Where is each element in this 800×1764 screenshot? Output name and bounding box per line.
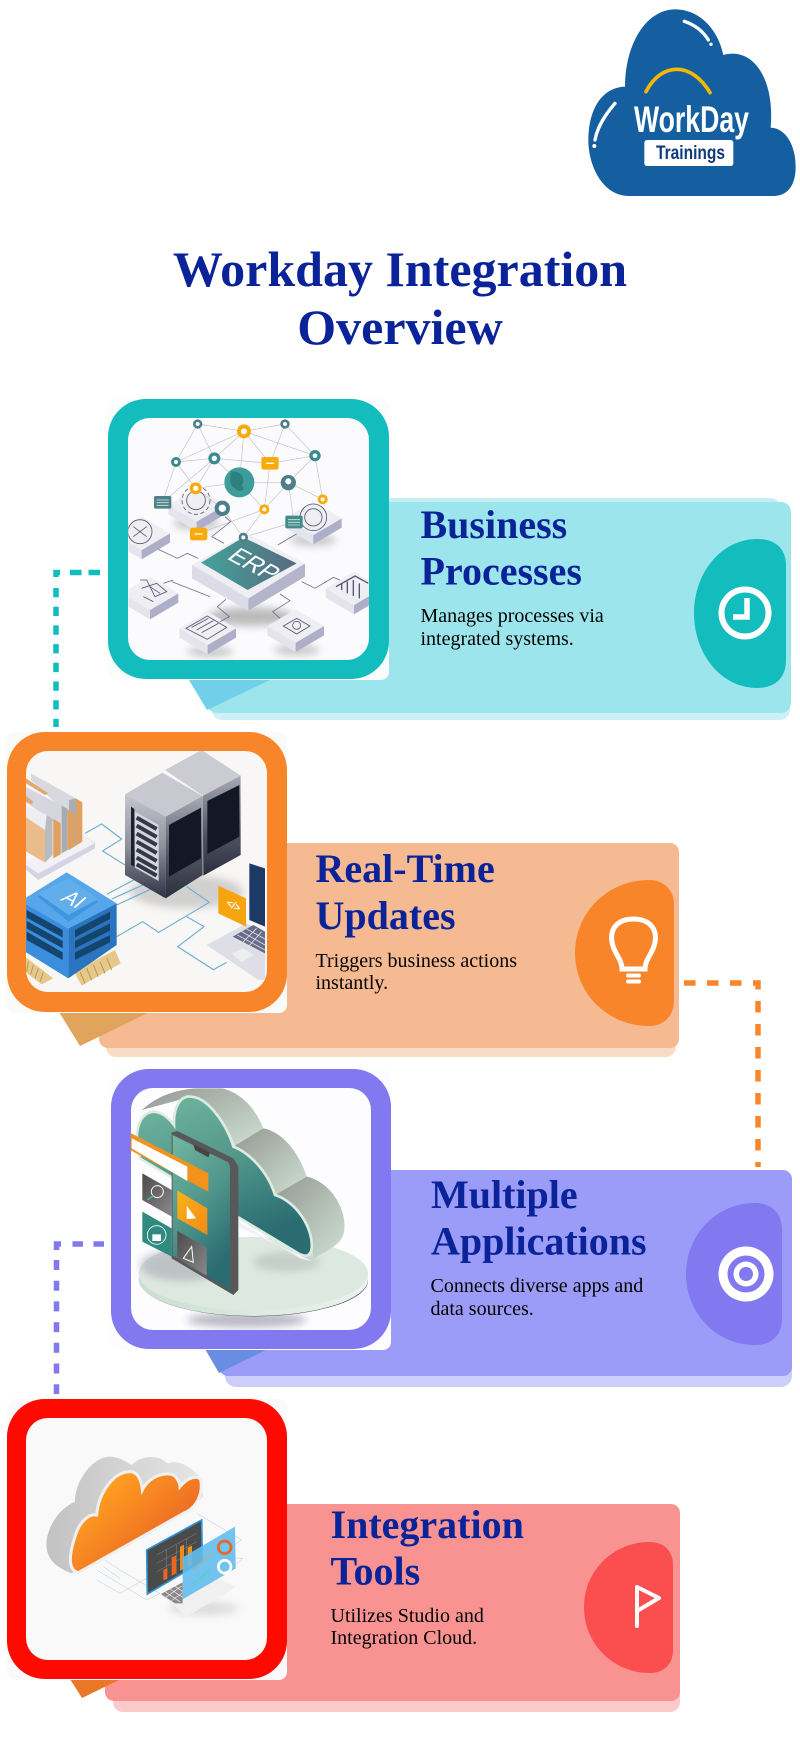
card: ERP illustration bbox=[108, 399, 389, 680]
title: Workday Integration bbox=[173, 241, 627, 297]
heading: Business Processes: Business bbox=[420, 502, 567, 547]
connector: teal dashed from card 1 to card 2 bbox=[56, 572, 100, 727]
connector: orange dashed from card 2 to card 3 bbox=[684, 983, 758, 1167]
logo: WorkDay Trainings cloud bbox=[588, 9, 796, 196]
card: orange cloud and dashboard illustration bbox=[7, 1399, 287, 1680]
text: Integration Tools description bbox=[330, 1605, 484, 1649]
card: server and AI illustration bbox=[7, 732, 287, 1013]
heading: Multiple Applications: Applications bbox=[431, 1218, 647, 1264]
icon backdrop: target bbox=[686, 1203, 782, 1345]
heading: Integration Tools: Tools bbox=[330, 1548, 420, 1594]
text: Real-Time Updates description: Triggers business actions bbox=[316, 950, 517, 972]
title: Overview bbox=[297, 299, 503, 355]
heading: Real-Time Updates: Updates bbox=[316, 893, 456, 938]
card: server and AI illustration: AI bbox=[56, 887, 92, 912]
heading: Real-Time Updates bbox=[316, 846, 495, 938]
icon: target bbox=[718, 1246, 774, 1302]
connector: purple dashed from card 3 to card 4 bbox=[56, 1244, 104, 1394]
text: Integration Tools description: Integration Cloud. bbox=[330, 1627, 477, 1649]
heading: Business Processes: Processes bbox=[420, 548, 582, 594]
text: Business Processes description bbox=[420, 605, 604, 650]
icon: clock bbox=[722, 590, 768, 636]
heading: Integration Tools: Integration bbox=[330, 1502, 524, 1547]
text: Multiple Applications description: data sources. bbox=[430, 1298, 534, 1320]
icon backdrop: flag bbox=[584, 1542, 673, 1673]
text: Integration Tools description: Utilizes Studio and bbox=[330, 1605, 484, 1627]
heading: Real-Time Updates: Real-Time bbox=[316, 846, 495, 891]
text: Real-Time Updates description: instantly. bbox=[316, 972, 388, 994]
card: cloud and phone illustration bbox=[111, 1069, 391, 1350]
logo: WorkDay Trainings cloud: Trainings bbox=[656, 143, 725, 164]
text: Real-Time Updates description bbox=[316, 950, 517, 994]
icon backdrop: light bulb bbox=[575, 880, 674, 1026]
card: ERP illustration: ERP bbox=[221, 544, 287, 586]
icon: light bulb bbox=[612, 919, 656, 982]
panel: Real-Time Updates bbox=[59, 843, 679, 1057]
icon backdrop: clock bbox=[694, 539, 786, 688]
heading: Integration Tools bbox=[330, 1502, 524, 1594]
text: Business Processes description: integrated systems. bbox=[420, 628, 574, 650]
heading: Multiple Applications: Multiple bbox=[431, 1172, 578, 1217]
logo: WorkDay Trainings cloud: WorkDay bbox=[634, 99, 749, 140]
panel: Business Processes bbox=[189, 498, 791, 720]
heading: Multiple Applications bbox=[431, 1172, 647, 1264]
heading: Business Processes bbox=[420, 502, 582, 594]
title bbox=[173, 241, 627, 355]
text: Multiple Applications description bbox=[430, 1275, 643, 1320]
card: server and AI illustration: </> bbox=[224, 898, 242, 914]
text: Business Processes description: Manages processes via bbox=[420, 605, 604, 627]
text: Multiple Applications description: Connects diverse apps and bbox=[430, 1275, 643, 1297]
icon: flag bbox=[637, 1587, 659, 1626]
panel: Integration Tools bbox=[70, 1502, 680, 1712]
panel: Multiple Applications bbox=[205, 1170, 792, 1387]
